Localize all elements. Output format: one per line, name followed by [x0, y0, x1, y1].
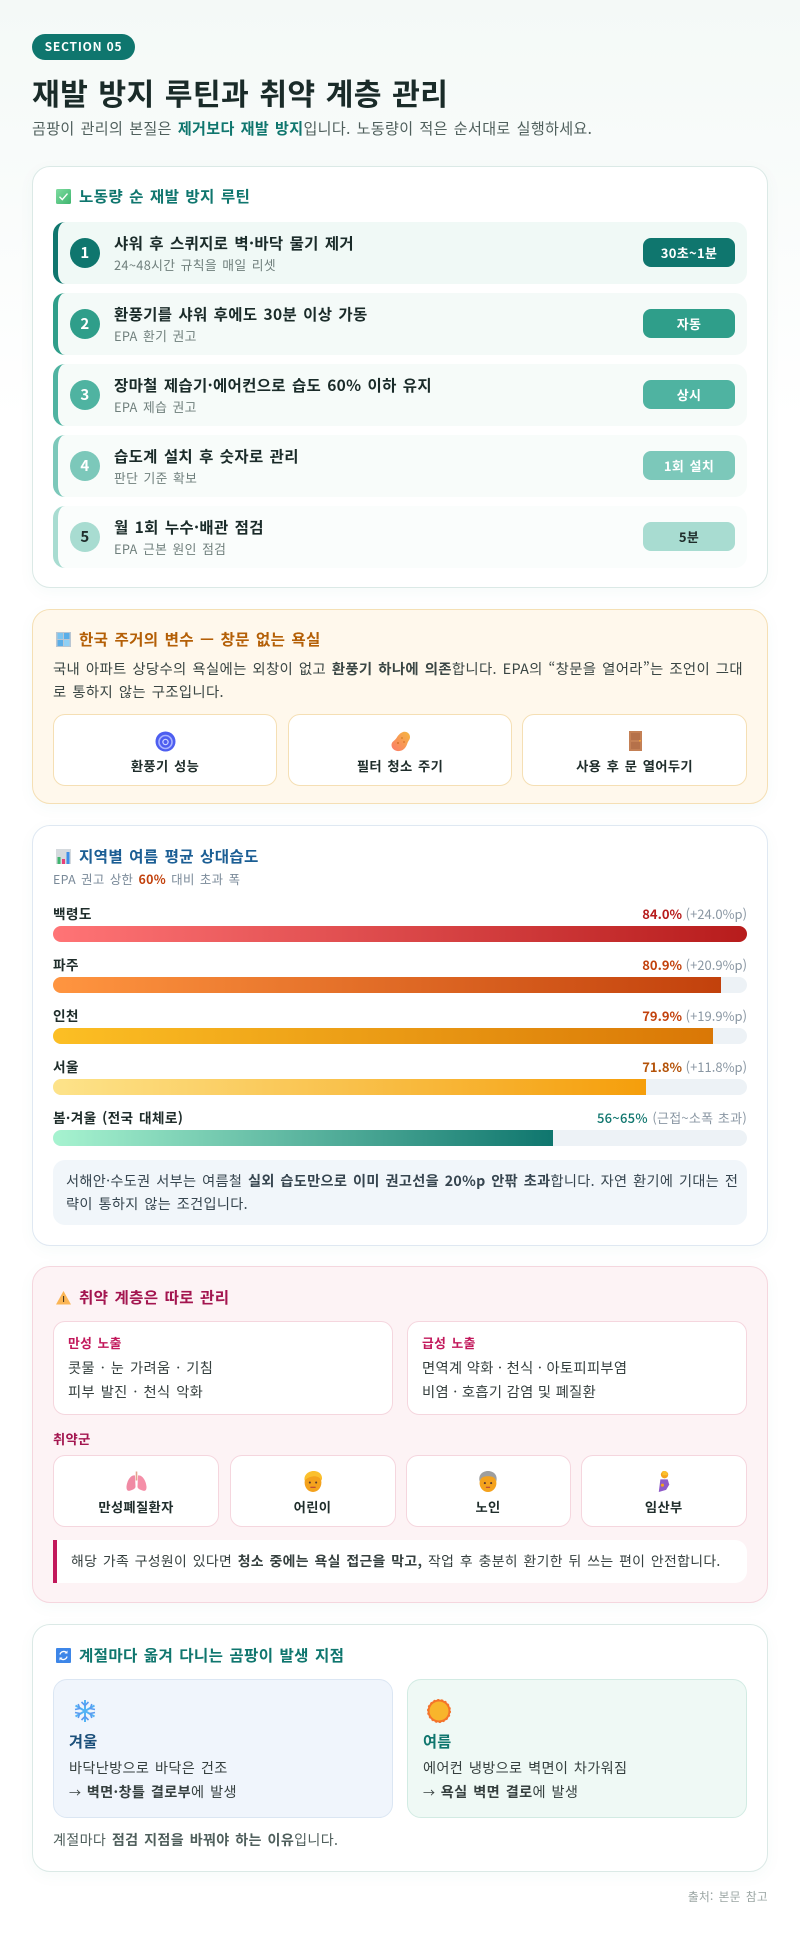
subtitle: 곰팡이 관리의 본질은 제거보다 재발 방지입니다. 노동량이 적은 순서대로 실행하세요. [32, 117, 592, 139]
panel: vulnerable groups [32, 1266, 768, 1603]
bar: 백령도: 백령도 [53, 903, 92, 923]
summer card: 여름 [423, 1730, 452, 1752]
step 5: 5분 [679, 527, 699, 546]
step 3 [53, 364, 747, 426]
winter card: → 벽면·창틀 결로부에 발생 [69, 1782, 237, 1802]
icon: sun [427, 1699, 451, 1723]
bar: 서울: 71.8% (+11.8%p) [642, 1057, 747, 1076]
tile: fan: 환풍기 성능 [131, 756, 199, 775]
chart note: 략이 통하지 않는 조건입니다. [66, 1194, 248, 1214]
vulnerable groups label: 취약군 [53, 1429, 91, 1448]
housing heading: 한국 주거의 변수 — 창문 없는 욕실 [79, 628, 321, 650]
icon: snowflake [74, 1700, 96, 1722]
tile: COPD: 만성폐질환자 [98, 1497, 174, 1516]
acute exposure card [407, 1321, 747, 1415]
summer card: 에어컨 냉방으로 벽면이 차가워짐 [423, 1758, 627, 1778]
chronic exposure card: 만성 노출 [68, 1333, 122, 1352]
step 2: EPA 환기 권고 [114, 326, 197, 345]
chronic exposure card: 콧물 · 눈 가려움 · 기침 [68, 1357, 213, 1378]
step 1: 1 [80, 242, 90, 263]
step 4: 습도계 설치 후 숫자로 관리 [114, 445, 299, 467]
step 1: 30초~1분 [661, 243, 717, 262]
tile: door [522, 714, 747, 786]
chart subtitle: EPA 권고 상한 60% 대비 초과 폭 [53, 870, 240, 888]
vulnerable callout: 해당 가족 구성원이 있다면 청소 중에는 욕실 접근을 막고, 작업 후 충분히 환기한 뒤 쓰는 편이 안전합니다. [71, 1551, 721, 1571]
housing text: 국내 아파트 상당수의 욕실에는 외창이 없고 환풍기 하나에 의존합니다. EPA의 “창문을 열어라”는 조언이 그대 [53, 658, 743, 678]
step 5: 5 [80, 526, 90, 547]
step 5: EPA 근본 원인 점검 [114, 539, 226, 558]
chart note: 서해안·수도권 서부는 여름철 실외 습도만으로 이미 권고선을 20%p 안팎 초과합니다. 자연 환기에 기대는 전 [66, 1171, 738, 1191]
step 5 [53, 506, 735, 568]
acute exposure card: 급성 노출 [422, 1333, 476, 1352]
chart heading: 지역별 여름 평균 상대습도 [79, 845, 259, 867]
vulnerable callout [53, 1540, 747, 1583]
bar: 서울: 서울 [53, 1056, 79, 1076]
bar: 인천: 인천 [53, 1005, 79, 1025]
winter card [53, 1679, 393, 1818]
step 2: 자동 [677, 314, 701, 333]
step 3: 3 [80, 384, 90, 405]
tile: elderly: 노인 [475, 1497, 501, 1516]
tile: COPD [53, 1455, 219, 1527]
tile: door: 사용 후 문 열어두기 [576, 756, 693, 775]
step 5: 월 1회 누수·배관 점검 [114, 516, 264, 538]
section badge [32, 34, 135, 60]
seasons footer text: 계절마다 점검 지점을 바꿔야 하는 이유입니다. [53, 1830, 338, 1850]
panel: routine [32, 166, 768, 588]
bar: 인천: 79.9% (+19.9%p) [642, 1006, 747, 1025]
tile: child: 어린이 [294, 1497, 331, 1516]
winter card: 바닥난방으로 바닥은 건조 [69, 1758, 228, 1778]
step 3: EPA 제습 권고 [114, 397, 197, 416]
summer card: → 욕실 벽면 결로에 발생 [423, 1782, 578, 1802]
chronic exposure card: 피부 발진 · 천식 악화 [68, 1381, 203, 1402]
bar: 봄·겨울 [53, 1107, 747, 1146]
step 4: 판단 기준 확보 [114, 468, 197, 487]
step 4 [53, 435, 735, 497]
seasons heading: 계절마다 옮겨 다니는 곰팡이 발생 지점 [79, 1644, 344, 1666]
tile: fan [53, 714, 277, 786]
step 1: 24~48시간 규칙을 매일 리셋 [114, 255, 276, 274]
step 3: 장마철 제습기·에어컨으로 습도 60% 이하 유지 [114, 374, 432, 396]
acute exposure card: 면역계 약화 · 천식 · 아토피피부염 [422, 1357, 627, 1378]
tile: pregnant [580, 1455, 747, 1527]
routine heading: 노동량 순 재발 방지 루틴 [79, 185, 250, 207]
panel: seasons [32, 1624, 768, 1872]
housing text [53, 658, 743, 702]
step 2: 2 [80, 313, 90, 334]
winter card: 겨울 [69, 1730, 98, 1752]
bar: 봄·겨울: 봄·겨울 (전국 대체로) [53, 1107, 183, 1127]
tile: pregnant: 임산부 [645, 1497, 683, 1516]
source note: 출처: 본문 참고 [688, 1888, 768, 1905]
step 4: 4 [80, 455, 90, 476]
bar: 파주: 80.9% (+20.9%p) [642, 955, 747, 974]
panel: korean housing [32, 609, 768, 804]
tile: child [230, 1455, 396, 1527]
housing text: 로 통하지 않는 구조입니다. [53, 680, 224, 702]
bar: 백령도 [53, 903, 747, 942]
vulnerable heading: 취약 계층은 따로 관리 [79, 1286, 229, 1308]
step 1 [53, 222, 747, 284]
tile: filter [288, 714, 512, 786]
panel: humidity chart [32, 825, 768, 1246]
summer card [407, 1679, 747, 1818]
acute exposure card: 비염 · 호흡기 감염 및 폐질환 [422, 1381, 596, 1402]
bar: 인천 [53, 1005, 747, 1044]
chart note [53, 1160, 747, 1225]
step 2: 환풍기를 샤워 후에도 30분 이상 가동 [114, 303, 368, 325]
step 3: 상시 [677, 385, 701, 404]
step 2 [53, 293, 747, 355]
bar: 파주 [53, 954, 747, 993]
bar: 파주: 파주 [53, 954, 79, 974]
section badge: SECTION 05 [45, 38, 122, 55]
chronic exposure card [53, 1321, 393, 1415]
tile: elderly [406, 1455, 570, 1527]
step 4: 1회 설치 [664, 456, 714, 475]
bar: 서울 [53, 1056, 747, 1095]
bar: 봄·겨울: 56~65% (근접~소폭 초과) [597, 1108, 747, 1127]
step 1: 샤워 후 스퀴지로 벽·바닥 물기 제거 [114, 232, 354, 254]
title: 재발 방지 루틴과 취약 계층 관리 [32, 70, 448, 114]
bar: 백령도: 84.0% (+24.0%p) [642, 904, 747, 923]
tile: filter: 필터 청소 주기 [357, 756, 443, 775]
